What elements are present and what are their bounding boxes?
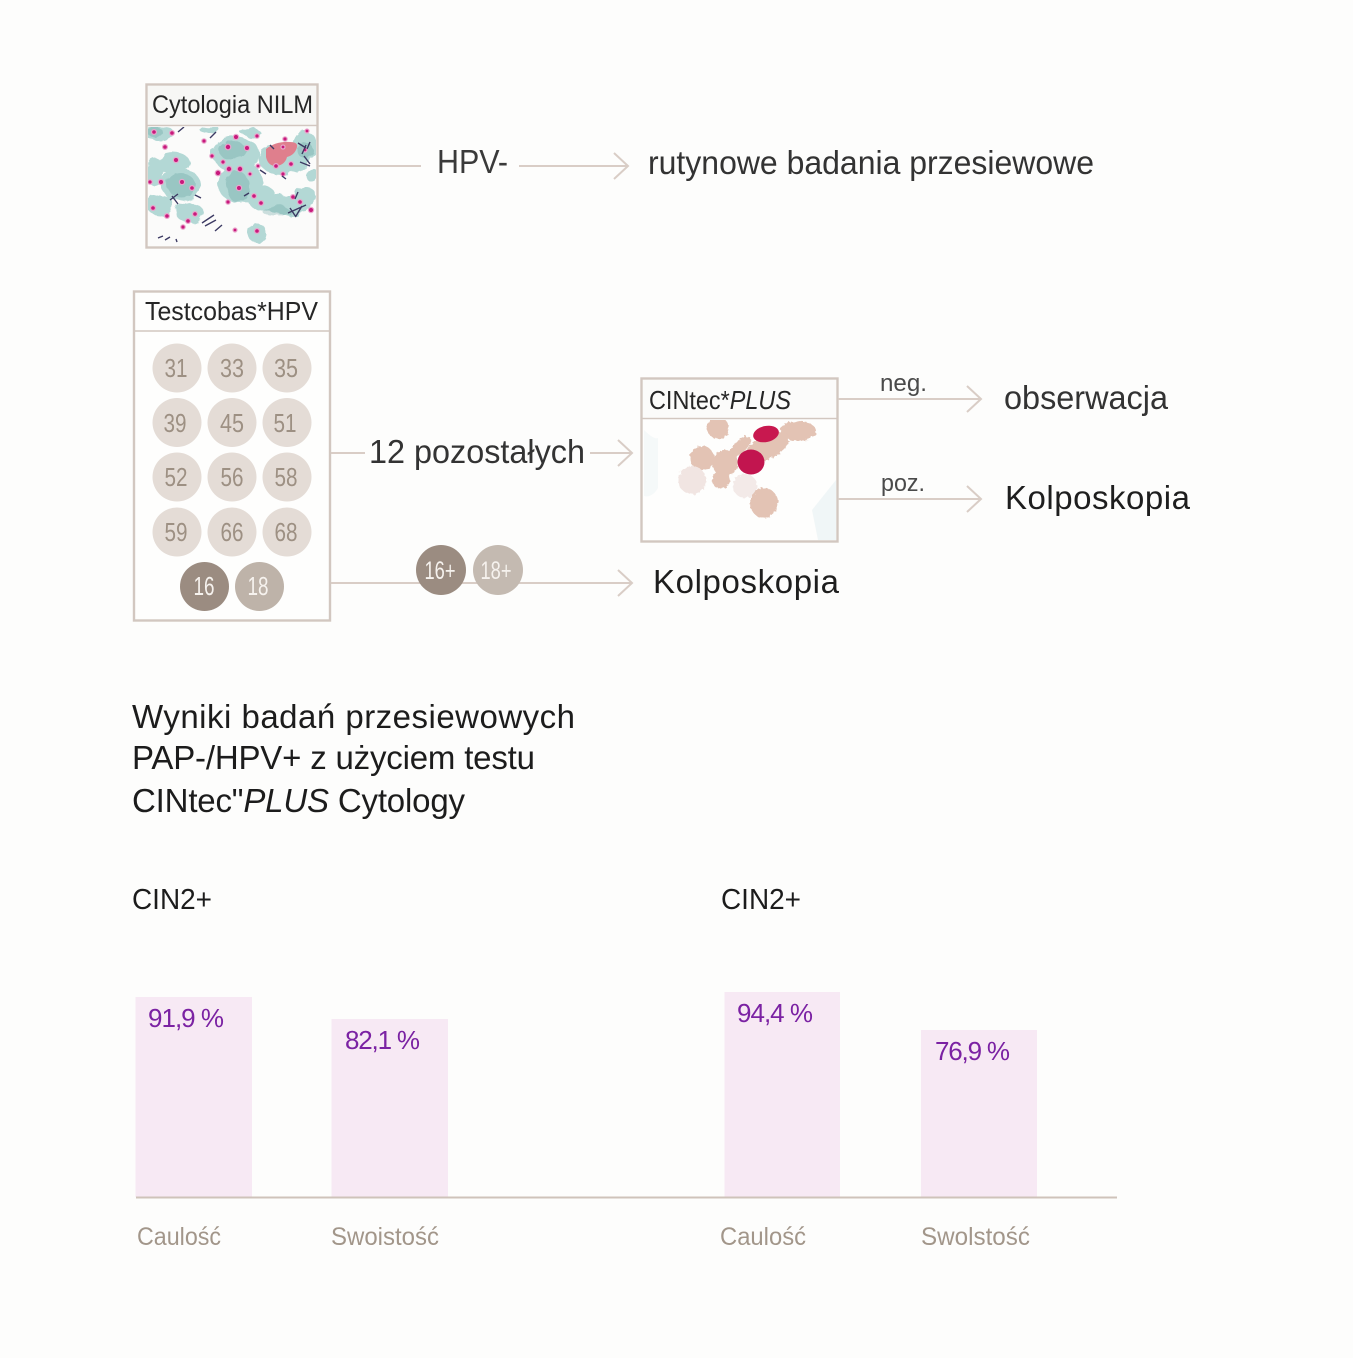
axis label: Caulość: Caulość <box>720 1223 806 1251</box>
HPV genotype circles: 33 <box>220 353 244 383</box>
title <box>132 698 575 819</box>
text: Kolposkopia (upper): Kolposkopia <box>1005 479 1191 516</box>
heading: CINtec PLUS: CINtec*PLUS <box>649 385 792 415</box>
arrow: HPV- to routine screening <box>519 153 628 179</box>
HPV genotype circles: 56 <box>220 462 244 492</box>
bar: Caulość 94,4 %: 94,4 % <box>737 998 813 1028</box>
title: CINtec"PLUS Cytology <box>132 782 466 819</box>
badge: 16+: 16+ <box>424 557 456 585</box>
axis label: Swoistość: Swoistość <box>331 1223 439 1251</box>
label: poz.: poz. <box>881 470 925 497</box>
arrow: HPV 16/18 to colposcopy <box>331 570 632 596</box>
HPV genotype circles: 45 <box>220 408 244 438</box>
bar: Swoistość 82,1 % <box>332 1019 448 1197</box>
arrow: negative <box>838 386 981 412</box>
bar: Caulość 91,9 % <box>136 997 252 1197</box>
bar: Caulość 94,4 % <box>724 992 840 1197</box>
HPV genotype circles: 16 <box>194 571 214 601</box>
HPV genotype circles: 51 <box>274 408 296 438</box>
HPV genotype circles: 18 <box>248 571 268 601</box>
badge: 18+ <box>473 545 523 595</box>
heading: Test cobas HPV: Testcobas*HPV <box>145 296 319 326</box>
image: stained cells <box>644 417 836 540</box>
arrow: positive <box>838 486 981 512</box>
title: PAP-/HPV+ z użyciem testu <box>132 739 535 776</box>
HPV genotype circles: 59 <box>164 517 188 547</box>
HPV genotype circles: 52 <box>164 462 188 492</box>
title: Wyniki badań przesiewowych <box>132 698 575 735</box>
bar chart: left CIN2+ <box>132 884 448 1251</box>
bar: Swolstość 76,9 % <box>921 1030 1037 1197</box>
panel: Cytologia NILM <box>142 84 318 248</box>
HPV genotype circles: 68 <box>274 517 298 547</box>
arrow: cytology to HPV- <box>318 165 421 167</box>
text: Kolposkopia (lower): Kolposkopia <box>653 563 840 600</box>
panel: Test cobas HPV <box>134 292 330 620</box>
text: obserwacja: obserwacja <box>1004 379 1169 416</box>
image: cytology cells <box>142 125 318 246</box>
HPV genotype circles: 39 <box>164 408 186 438</box>
HPV genotype circles: 31 <box>164 353 188 383</box>
heading: Cytologia NILM: Cytologia NILM <box>152 91 313 119</box>
label: neg.: neg. <box>880 370 927 397</box>
bar: Swolstość 76,9 %: 76,9 % <box>935 1036 1010 1066</box>
arrow: HPV panel to 12 remaining <box>331 452 365 454</box>
arrow: 12 remaining to CINtec <box>590 440 632 466</box>
bar: Caulość 91,9 %: 91,9 % <box>148 1003 224 1033</box>
bar: Swoistość 82,1 %: 82,1 % <box>345 1025 420 1055</box>
panel: CINtec PLUS <box>642 378 838 542</box>
axis label: Swolstość: Swolstość <box>921 1223 1030 1251</box>
label: 12 pozostałych: 12 pozostałych <box>369 433 585 470</box>
axis label: Caulość: Caulość <box>137 1223 221 1251</box>
badge: 16+ <box>416 545 466 595</box>
HPV genotype circles: 58 <box>274 462 298 492</box>
HPV genotype circles <box>152 344 312 611</box>
bar chart: right CIN2+ <box>720 884 1037 1251</box>
label: HPV-: HPV- <box>437 143 508 180</box>
badge: 18+: 18+ <box>480 557 512 585</box>
HPV genotype circles: 66 <box>220 517 244 547</box>
HPV genotype circles: 35 <box>274 353 298 383</box>
text: rutynowe badania przesiewowe: rutynowe badania przesiewowe <box>648 144 1094 181</box>
chart heading: right CIN2+: CIN2+ <box>721 884 801 916</box>
chart heading: left CIN2+: CIN2+ <box>132 884 212 916</box>
